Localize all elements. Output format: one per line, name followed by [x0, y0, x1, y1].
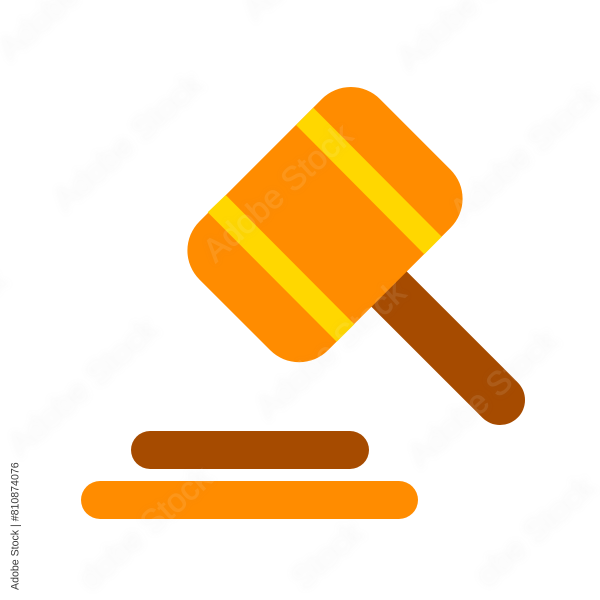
watermark: obe Stock	[468, 467, 600, 593]
head body	[170, 70, 480, 379]
watermark: Stock	[284, 513, 370, 596]
watermark: Adobe Stock	[195, 116, 360, 269]
gavel handle	[385, 285, 500, 400]
gavel head	[170, 70, 480, 379]
sound block bottom bar	[81, 481, 418, 519]
watermark: Adobe Stock	[0, 310, 165, 463]
watermark: Adobe Stock	[400, 321, 565, 474]
head lower yellow band	[208, 195, 354, 342]
head upper yellow band	[296, 108, 442, 254]
watermark: Adobe Stock	[248, 273, 413, 426]
sound block top bar	[131, 431, 369, 469]
stock id label: Adobe Stock | #810874076	[10, 462, 22, 590]
watermark: Adobe Stock	[45, 65, 210, 218]
watermark: dobe Stock	[71, 458, 219, 597]
